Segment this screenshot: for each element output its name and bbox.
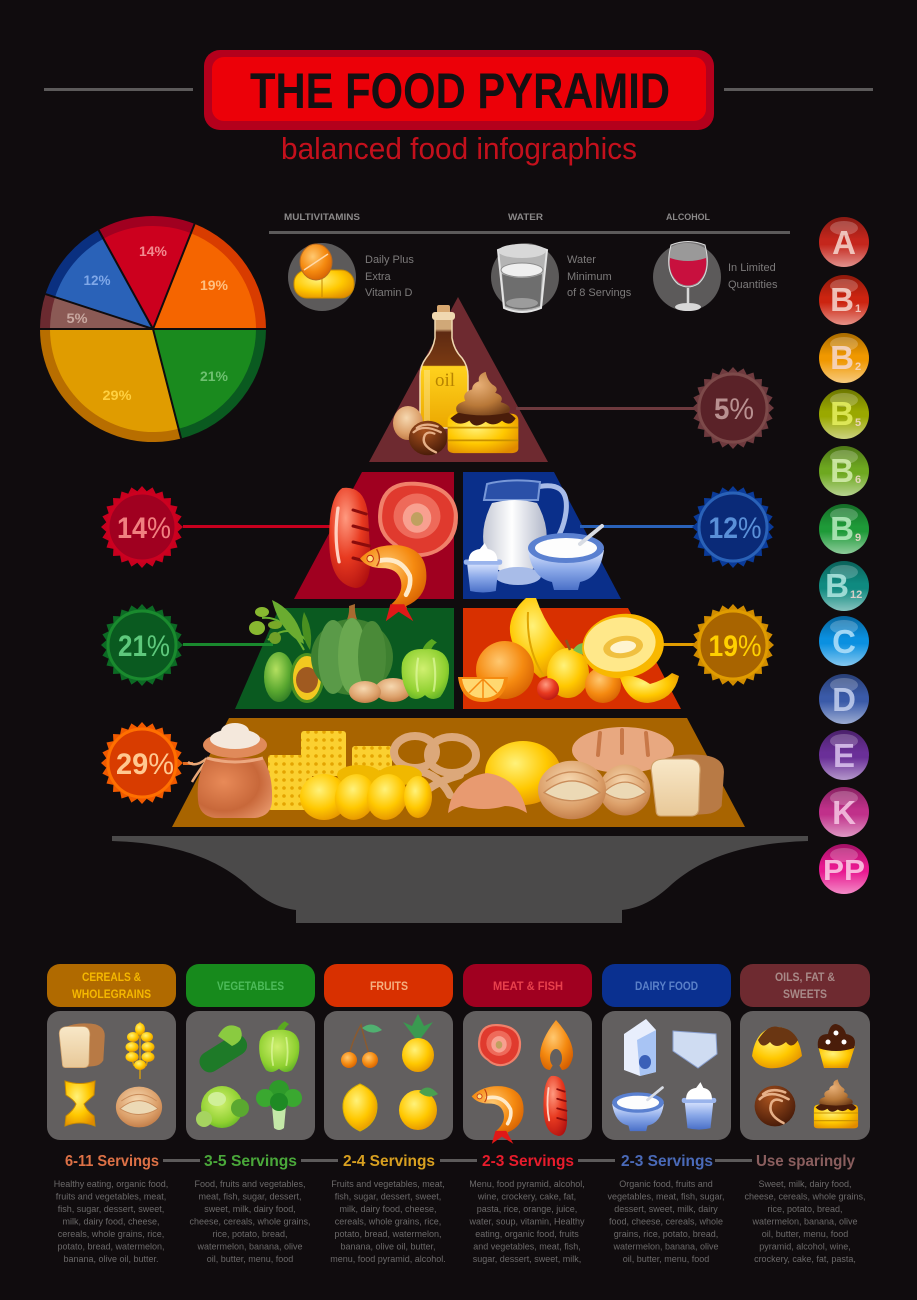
pie labels: 21% [200,368,229,384]
pyramid tiers [172,297,745,827]
icon: pumpkin [311,604,393,695]
icon: fish [360,545,426,621]
icon: banana [510,598,567,678]
vitamin: PP [819,844,869,894]
icon: yogurt [464,543,502,592]
description: vegetables: cheese, cereals, whole grains, [189,1216,311,1226]
vitamin: K [819,787,869,837]
badge: 5%: 5% [714,393,754,426]
heading: cereals: CEREALS & [82,970,141,984]
badge: 19% [692,604,774,686]
panel: fruits [324,1011,453,1140]
icon: melon [578,609,668,683]
icon: tangerine [585,667,621,703]
heading: cereals: WHOLEGRAINS [72,987,151,1001]
icon: cottage cheese bowl [612,1088,664,1131]
serving labels: 3-5 Servings [204,1153,297,1170]
icon: pretzel [394,736,476,800]
description: meat and fish: water, soup, vitamin, Healthy [468,1216,585,1226]
icon: pudding [752,1027,802,1068]
water text: Minimum [567,271,612,283]
description: oils and sweets: cheese, cereals, whole grains, [744,1192,866,1202]
pie labels: 12% [84,272,111,288]
description: fruits: potato, bread, watermelon, [334,1229,442,1239]
vitamin: D: D [832,681,856,718]
pie labels [66,243,229,403]
panel: oils and sweets [740,1011,870,1140]
serving labels: 2-3 Servings [621,1153,713,1170]
icon: bread [59,1023,105,1068]
description: oils and sweets: rice, potato, bread, [767,1204,843,1214]
alcohol text: Quantities [728,279,778,291]
vitamin: E [819,730,869,780]
icon: apple [399,1087,438,1130]
badge: 29%: 29% [116,748,174,781]
icon: bread loaf [651,755,724,816]
icon: milk carton [624,1019,656,1076]
badge: 19%: 19% [708,630,762,663]
vitamin: B6 [819,446,869,496]
description: meat and fish: Menu, food pyramid, alcohol, [469,1179,585,1189]
water text: of 8 Servings [567,287,632,299]
heading: cereals [47,964,176,1007]
description: vegetables: watermelon, banana, olive [196,1242,303,1252]
panel: cereals [47,1011,176,1140]
icon: water glass [491,243,559,312]
description: oils and sweets: oil, butter, menu, food [762,1229,848,1239]
icon: melon slice [620,673,679,703]
description: oils and sweets: Sweet, milk, dairy food, [758,1179,852,1189]
icon: pineapple [402,1014,434,1072]
pie chart [40,216,266,442]
description: meat and fish: eating, organic food, fruits [475,1229,579,1239]
description: meat and fish: and vegetables, meat, fish, [473,1242,581,1252]
description: cereals: fish, sugar, dessert, sweet, [58,1204,164,1214]
heading: dairy [602,964,731,1007]
icon: broccoli [256,1080,302,1130]
pie labels: 5% [66,310,88,326]
description: oils and sweets: crockery, cake, fat, pasta, [754,1254,856,1264]
icon: orange slice [458,677,508,702]
description: meat and fish: wine, crockery, cake, fat, [477,1192,576,1202]
description: vegetables: Food, fruits and vegetables, [194,1179,306,1189]
heading: oils [740,964,870,1007]
multivitamins text: Vitamin D [365,287,413,299]
vitamin: B2 [819,333,869,383]
title banner [204,50,714,130]
icon: salmon steak [540,1020,573,1070]
icon: potatoes [349,678,411,703]
icon: wheat [126,1022,154,1079]
vitamin: B9 [819,504,869,554]
vitamin: B5: 5 [855,417,861,429]
icon: yogurt [682,1082,716,1130]
description: vegetables: rice, potato, bread, [212,1229,288,1239]
vitamin: PP: PP [823,855,865,887]
description: oils and sweets: watermelon, banana, olive [751,1216,858,1226]
icon: blue cheese [673,1031,717,1068]
icon: layered dessert [814,1079,858,1128]
badge: 21%: 21% [118,630,170,663]
badge: 29% [101,722,183,804]
vitamin: B9: B [830,510,854,547]
serving labels: 2-4 Servings [343,1153,435,1170]
description: fruits: fish, sugar, dessert, sweet, [335,1192,441,1202]
badge: 14% [101,486,183,568]
vitamin: K: K [832,794,856,831]
vitamin: B6: 6 [855,474,861,486]
title: THE FOOD PYRAMID [250,63,670,119]
badge: 12% [692,486,774,568]
description: cereals: milk, dairy food, cheese, [62,1216,160,1226]
description: dairy: food, cheese, cereals, whole [609,1216,723,1226]
description: cereals: fruits and vegetables, meat, [56,1192,166,1202]
icon: croissant [448,773,527,813]
vitamin: A [819,217,869,267]
vitamin: B1: B [830,281,854,318]
icon: apple [547,640,598,698]
description: vegetables: oil, butter, menu, food [207,1254,293,1264]
vitamin: B2: 2 [855,361,861,373]
serving labels: 2-3 Servings [482,1153,574,1170]
icon: braided loaf [300,765,432,824]
vitamin: B6: B [830,452,854,489]
icon: orange [476,641,534,699]
description: dairy: grains, rice, potato, bread, [614,1229,718,1239]
vitamin: B1 [819,275,869,325]
description: vegetables: meat, fish, sugar, dessert, [198,1192,302,1202]
icon: lemon [343,1084,377,1131]
icon: multivitamins [288,243,356,311]
icon: crackers [268,731,392,810]
serving labels: 6-11 Servings [65,1153,159,1170]
heading: vegetables [186,964,315,1007]
description: fruits: cereals, whole grains, rice, [335,1216,441,1226]
icon: ham [378,482,458,557]
vitamin: B12: B [825,567,849,604]
serving labels: Use sparingly [756,1153,855,1170]
icon: big loaf [572,727,674,773]
panel: dairy [602,1011,731,1140]
description: fruits: Fruits and vegetables, meat, [331,1179,445,1189]
pie labels: 19% [200,277,229,293]
heading: vegetables: VEGETABLES [217,979,284,993]
multivitamins text: Extra [365,271,392,283]
vitamin: B12: 12 [850,589,862,601]
vitamin: B1: 1 [855,303,861,315]
icon: avocado [264,652,324,703]
supplements header [269,212,790,234]
vitamin: C: C [832,623,856,660]
icon: bell pepper [259,1021,299,1072]
icon: oil bottle: oil [435,370,455,391]
icon: cottage cheese bowl [528,526,604,590]
description: cereals: potato, bread, watermelon, [57,1242,165,1252]
badge: 12%: 12% [708,512,762,545]
serving labels [65,1153,855,1170]
icon: cupcake [818,1024,855,1068]
heading: fruits: FRUITS [370,979,408,993]
badge: 14%: 14% [117,512,171,545]
panel: meat and fish [463,1011,592,1144]
icon: herbs [249,600,311,650]
icon: cherries [341,1024,382,1068]
icon: strawberry [537,678,559,700]
icon: sesame bun [485,741,561,805]
description: cereals: cereals, whole grains, rice, [58,1229,164,1239]
multivitamins text: Daily Plus [365,254,414,266]
icon: oil bottle [420,305,468,428]
description: oils and sweets: pyramid, alcohol, wine, [759,1242,851,1252]
subtitle: balanced food infographics [281,131,637,166]
supplements header: MULTIVITAMINS [284,212,360,223]
badge: 21% [101,604,183,686]
vitamin: B5 [819,389,869,439]
supplements header: WATER [508,212,543,223]
vitamin: B9: 9 [855,532,861,544]
description: dairy: dessert, sweet, milk, dairy [614,1204,718,1214]
vitamin: B12 [819,561,869,611]
badge: 5% [692,367,774,449]
icon: farfalle [65,1081,95,1126]
vitamin: D [819,674,869,724]
description: fruits: menu, food pyramid, alcohol. [330,1254,446,1264]
description: cereals: banana, olive oil, butter. [63,1254,159,1264]
description: dairy: watermelon, banana, olive [612,1242,719,1252]
icon: cucumber [196,1025,251,1076]
icon: flour sack [188,723,272,818]
icon: green pepper [402,639,449,699]
water text: Water [567,254,596,266]
description: cereals: Healthy eating, organic food, [54,1179,168,1189]
description: dairy: Organic food, fruits and [619,1179,713,1189]
vitamin: E: E [833,737,855,774]
description: vegetables: sweet, milk, dairy food, [204,1204,296,1214]
icon: truffle [755,1086,795,1126]
icon: fish [472,1086,524,1144]
icon: bread roll [116,1087,162,1127]
icon: round rolls [538,761,650,819]
icon: sausage [543,1076,567,1136]
icon: ham [478,1024,521,1066]
icon: milk jug [483,480,566,585]
alcohol text: In Limited [728,262,776,274]
heading: oils: OILS, FAT & [775,970,835,984]
vitamin: B5: B [830,395,854,432]
icon: wine glass [653,242,721,311]
heading: oils: SWEETS [783,987,827,1001]
vitamin: A: A [832,224,856,261]
icon: oil tier sweets [393,372,518,455]
heading: meat and fish [463,964,592,1007]
pie labels: 14% [139,243,168,259]
panel: vegetables [186,1011,315,1140]
vitamin: C [819,616,869,666]
heading: fruits [324,964,453,1007]
connector lines [183,407,694,765]
heading: dairy: DAIRY FOOD [635,979,698,993]
heading: meat and fish: MEAT & FISH [493,979,563,993]
description: fruits: milk, dairy food, cheese, [339,1204,437,1214]
description: meat and fish: pasta, rice, orange, juice, [477,1204,577,1214]
description: dairy: oil, butter, menu, food [623,1254,709,1264]
pie labels: 29% [102,387,132,403]
supplements header: ALCOHOL [666,212,710,223]
header rules [44,88,873,91]
description: dairy: vegetables, meat, fish, sugar, [607,1192,725,1202]
icon: lettuce [196,1086,249,1128]
vitamin: B2: B [830,339,854,376]
description: meat and fish: sugar, dessert, sweet, milk, [473,1254,581,1264]
description: fruits: banana, olive oil, butter, [340,1242,436,1252]
icon: sausage [329,488,370,588]
icon: bowl base [112,836,808,923]
